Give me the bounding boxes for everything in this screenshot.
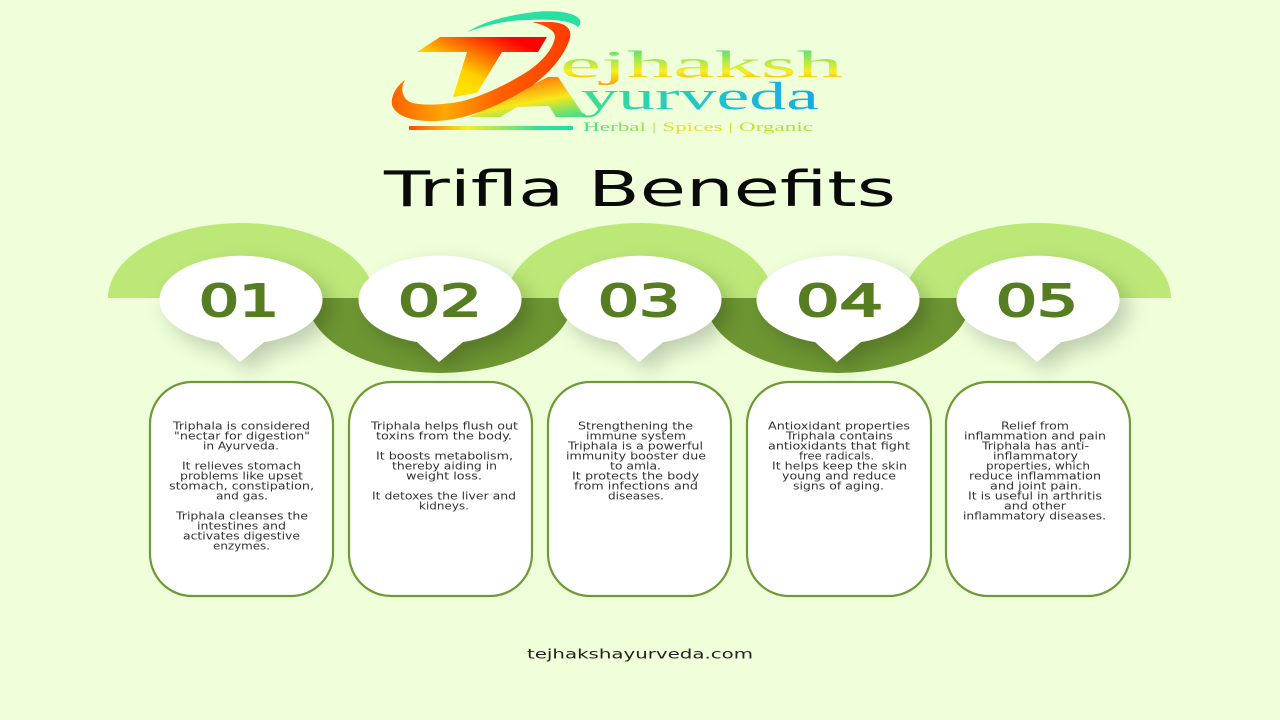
title: Trifla Benefits xyxy=(382,161,896,218)
panel: card 1 digestion: Triphala cleanses the xyxy=(175,510,308,522)
panel: card 1 digestion: stomach, constipation, xyxy=(169,480,314,492)
panel: card 5 inflammation: inflammatory diseases. xyxy=(963,510,1106,522)
panel: card 2 detox: kidneys. xyxy=(419,500,469,512)
icon: green swoosh xyxy=(467,11,580,32)
number bubble 02: 02 xyxy=(398,276,482,327)
number bubble 05 xyxy=(956,256,1120,362)
panel: card 5 inflammation: It is useful in arthritis xyxy=(968,490,1102,502)
panel: card 5 inflammation: inflammation and pain xyxy=(964,430,1106,442)
light arc 1 xyxy=(108,223,374,298)
logo underline bar xyxy=(409,126,573,130)
panel: card 2 detox: weight loss. xyxy=(406,470,482,482)
number bubble 03: 03 xyxy=(598,276,680,327)
panel: card 4 antioxidants: free radicals. xyxy=(799,450,874,462)
panel: card 5 inflammation: and joint pain. xyxy=(990,480,1082,492)
panel: card 1 digestion: It relieves stomach xyxy=(182,460,301,472)
panel: card 5 inflammation: and other xyxy=(1004,500,1067,512)
panel: card 3 immunity: Triphala is a powerful xyxy=(567,440,703,452)
number bubble 01 xyxy=(159,256,322,362)
icon: letter A xyxy=(470,77,585,117)
panel: card 5 inflammation: properties, which xyxy=(986,460,1090,472)
panel: card 4 antioxidants: signs of aging. xyxy=(793,480,884,492)
number bubble 03 xyxy=(558,256,721,362)
panel: card 5 inflammation: inflammatory xyxy=(993,450,1078,462)
logo word: ejhaksh: ejhaksh xyxy=(560,44,843,86)
panel: card 1 digestion xyxy=(150,382,333,596)
panel: card 5 inflammation xyxy=(946,382,1130,596)
light arc 5 xyxy=(905,223,1171,298)
panel: card 3 immunity: immune system xyxy=(586,430,686,442)
number bubble 04: 04 xyxy=(796,276,883,327)
logo: Tejhaksh Ayurveda xyxy=(392,11,843,134)
dark arc 4 xyxy=(705,298,971,373)
number bubble 02 xyxy=(359,256,522,362)
panel: card 4 antioxidants xyxy=(747,382,931,596)
panel: card 5 inflammation: Triphala has anti- xyxy=(981,440,1089,452)
wave of arcs xyxy=(108,223,1171,373)
panel: card 1 digestion: enzymes. xyxy=(213,540,270,552)
panel: card 2 detox: It detoxes the liver and xyxy=(372,490,516,502)
panel: card 1 digestion: intestines and xyxy=(197,520,286,532)
number bubble 04 xyxy=(756,256,919,362)
panel: card 1 digestion: activates digestive xyxy=(183,530,300,542)
number bubble 05: 05 xyxy=(996,276,1078,327)
panel: card 5 inflammation: Relief from xyxy=(1001,420,1069,432)
panel: card 5 inflammation: reduce inflammation xyxy=(969,470,1101,482)
panel: card 2 detox: It boosts metabolism, xyxy=(376,450,513,462)
website footer: tejhakshayurveda.com xyxy=(527,648,753,662)
number bubble 01: 01 xyxy=(199,276,279,327)
dark arc 2 xyxy=(307,298,573,373)
panel: card 1 digestion: in Ayurveda. xyxy=(203,440,279,452)
panel: card 2 detox: toxins from the body. xyxy=(376,430,512,442)
panel: card 2 detox: Triphala helps flush out xyxy=(370,420,518,432)
panel: card 4 antioxidants: young and reduce xyxy=(782,470,896,482)
panel: card 1 digestion: and gas. xyxy=(216,490,268,502)
panel: card 1 digestion: Triphala is considered xyxy=(172,420,310,432)
panel: card 3 immunity: It protects the body xyxy=(572,470,699,482)
panel: card 3 immunity: diseases. xyxy=(608,490,664,502)
logo word: yurveda: yurveda xyxy=(581,75,819,118)
panel: card 1 digestion: problems like upset xyxy=(180,470,303,482)
panel: card 4 antioxidants: antioxidants that fight xyxy=(768,440,910,452)
panel: card 2 detox: thereby aiding in xyxy=(392,460,497,472)
panel: card 2 detox xyxy=(349,382,532,596)
icon: letter T xyxy=(417,37,547,97)
panel: card 3 immunity: to amla. xyxy=(610,460,661,472)
panel: card 1 digestion: "nectar for digestion" xyxy=(174,430,310,442)
logo tagline: Herbal | Spices | Organic xyxy=(583,120,814,134)
panel: card 3 immunity xyxy=(548,382,731,596)
panel: card 4 antioxidants: It helps keep the skin xyxy=(772,460,907,472)
icon: orange swoosh xyxy=(392,22,570,121)
panel: card 3 immunity: immunity booster due xyxy=(566,450,706,462)
panel: card 3 immunity: Strengthening the xyxy=(578,420,693,432)
panel: card 4 antioxidants: Antioxidant properties xyxy=(768,420,910,432)
light arc 3 xyxy=(507,223,773,298)
panel: card 4 antioxidants: Triphala contains xyxy=(785,430,893,442)
panel: card 3 immunity: from infections and xyxy=(574,480,698,492)
